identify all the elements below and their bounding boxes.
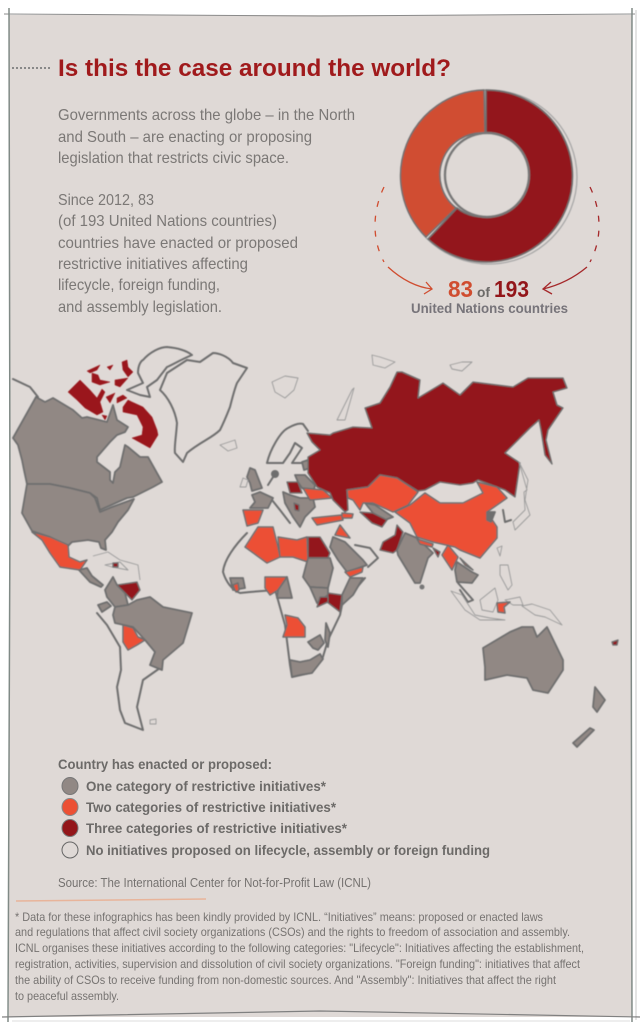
legend: one category: One category of restrictive initiatives* xyxy=(86,778,327,794)
footnote: * Data for these infographics has been kindly provided by ICNL. “Initiatives” means: proposed or enacted laws xyxy=(15,910,543,924)
intro text block: legislation that restricts civic space. xyxy=(58,150,289,167)
africa outline xyxy=(223,533,365,677)
usa: one category xyxy=(22,484,134,550)
legend: two categories: Two categories of restrictive initiatives* xyxy=(86,799,337,815)
southern africa xyxy=(290,623,330,677)
intro text block: Since 2012, 83 xyxy=(58,192,154,209)
canada: one category xyxy=(13,397,162,510)
legend xyxy=(58,756,490,858)
kenya and uganda: three categories xyxy=(317,593,342,612)
intro text block: lifecycle, foreign funding, xyxy=(58,277,220,294)
russia: three categories xyxy=(307,372,567,512)
legend: no initiatives: No initiatives proposed on lifecycle, assembly or foreign funding xyxy=(86,842,490,858)
fiji xyxy=(612,640,618,645)
legend heading: Country has enacted or proposed: xyxy=(58,756,272,772)
title: Is this the case around the world? xyxy=(58,55,451,82)
nigeria: two categories xyxy=(265,577,287,595)
orange divider xyxy=(16,899,206,901)
new zealand: one category xyxy=(573,687,605,747)
right dashed arrow xyxy=(543,187,599,294)
cameroon xyxy=(277,577,292,598)
kazakhstan: two categories xyxy=(347,475,418,512)
left dashed arrow xyxy=(375,187,432,294)
ecuador xyxy=(98,602,111,612)
legend: three categories: Three categories of restrictive initiatives* xyxy=(86,820,348,836)
footnote xyxy=(15,910,584,1003)
sri lanka xyxy=(420,584,424,590)
egypt: three categories xyxy=(308,537,330,558)
intro text block xyxy=(58,107,355,316)
donut caption: 83 xyxy=(448,276,473,302)
intro text block: and assembly legislation. xyxy=(58,299,222,316)
intro text block: Governments across the globe – in the North xyxy=(58,107,355,124)
india: one category xyxy=(397,533,433,583)
central asia xyxy=(360,503,393,527)
west africa xyxy=(230,578,245,592)
angola: two categories xyxy=(283,615,305,637)
footnote: registration, activities, supervision and dissolution of civil society organizations. "Foreign funding": initiatives that affect xyxy=(15,957,581,971)
brazil: one category xyxy=(113,597,192,670)
algeria: two categories xyxy=(245,527,280,563)
asia-pacific island outlines xyxy=(451,462,562,625)
south america outline xyxy=(97,613,160,730)
sulawesi: two categories xyxy=(497,602,510,613)
caribbean outlines xyxy=(93,552,140,580)
footnote: ICNL organises these initiatives according to the following categories: "Lifecycle": Initiatives affecting the establishment, xyxy=(15,941,584,955)
source: Source: The International Center for Not-for-Profit Law (ICNL) xyxy=(58,876,371,890)
south-east asia xyxy=(417,539,478,602)
footnote: to peaceful assembly. xyxy=(15,989,119,1003)
intro text block: (of 193 United Nations countries) xyxy=(58,213,277,230)
donut chart: 83 of 193 xyxy=(401,90,577,264)
greenland and arctic outlines xyxy=(13,347,472,462)
libya: two categories xyxy=(278,537,308,562)
footnote: and regulations that affect civil society organizations (CSOs) and the rights to freedom of association and assembly. xyxy=(15,925,570,939)
venezuela: three categories xyxy=(117,582,140,600)
intro text block: and South – are enacting or proposing xyxy=(58,129,312,146)
china: two categories xyxy=(395,482,507,558)
pakistan: three categories xyxy=(380,525,403,553)
middle east xyxy=(330,525,378,577)
donut caption: 193 xyxy=(494,276,529,302)
canadian arctic islands: three categories xyxy=(68,360,158,448)
bolivia: two categories xyxy=(123,625,145,650)
europe xyxy=(240,424,353,527)
intro text block: restrictive initiatives affecting xyxy=(58,256,248,273)
donut caption xyxy=(411,276,568,316)
korea xyxy=(487,512,495,522)
world map xyxy=(13,347,618,747)
title dotted leader xyxy=(12,67,50,69)
donut caption: United Nations countries xyxy=(411,300,568,316)
sudan: one category xyxy=(303,558,333,588)
australia: one category xyxy=(483,627,563,693)
mexico: two categories xyxy=(32,532,87,570)
donut caption: of xyxy=(477,284,490,300)
colombia: one category xyxy=(105,577,128,607)
ethiopia and somalia xyxy=(310,578,363,605)
footnote: the ability of CSOs to receive funding from non-domestic sources. And "Assembly": Initiatives that affect the right xyxy=(15,973,557,987)
intro text block: countries have enacted or proposed xyxy=(58,235,298,252)
central america xyxy=(79,568,103,587)
